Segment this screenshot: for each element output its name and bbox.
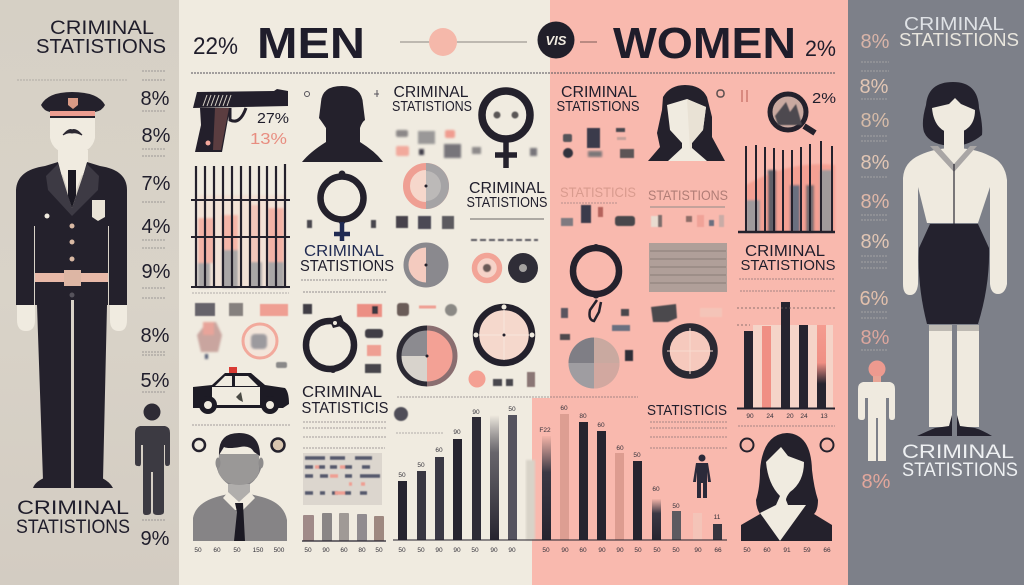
panel: women section background xyxy=(532,0,848,585)
percent column: men: 4% xyxy=(142,216,171,238)
panel: left police column xyxy=(0,0,179,585)
chart: bars with gridlines: 24 xyxy=(800,413,808,420)
axis labels: lower women: 50 xyxy=(743,547,751,554)
heading: criminal statistics 5: CRIMINAL xyxy=(745,243,825,260)
icon: versus connector xyxy=(400,22,597,58)
chart: central bar chart: 90 xyxy=(694,547,702,554)
heading: criminal statistics 4: CRIMINAL xyxy=(561,84,637,101)
percent column: women xyxy=(860,31,891,493)
labels: faded statistics: STATISTICIS xyxy=(560,184,636,200)
table: blurred data grid xyxy=(303,453,382,505)
axis labels: lower men: 50 xyxy=(233,547,241,554)
chart: central bar chart: 11 xyxy=(714,514,721,521)
percent column: women: 8% xyxy=(861,231,890,253)
heading: right bottom criminal statistics xyxy=(902,442,1018,481)
heading: criminal statistics 4 xyxy=(556,84,640,115)
heading: criminal statistics 3: CRIMINAL xyxy=(469,180,545,197)
axis labels: lower men: 150 xyxy=(253,547,264,554)
axis labels: lower women: 91 xyxy=(783,547,791,554)
chart: central bar chart: 90 xyxy=(508,547,516,554)
heading: criminal statistics 1 xyxy=(300,243,394,275)
title: men xyxy=(193,19,365,68)
heading: left bottom criminal statistics: STATISTIONS xyxy=(16,517,130,538)
chart: bars with gridlines xyxy=(737,302,835,420)
chart: ring men xyxy=(474,304,534,363)
heading: left criminal statistics xyxy=(36,18,166,58)
axis labels: lower women: 66 xyxy=(823,547,831,554)
icon: handcuff female symbol xyxy=(307,170,376,241)
heading: right bottom criminal statistics: CRIMINAL xyxy=(902,442,1014,463)
stat: gun percentages: 27% xyxy=(257,110,289,127)
percent column: men: 5% xyxy=(141,370,170,392)
labels: faded statistics: STATISTIONS xyxy=(648,187,728,203)
heading: criminal statistics 2 xyxy=(392,84,472,115)
title: men: MEN xyxy=(257,19,365,68)
chart: central bar chart: 50 xyxy=(417,462,425,469)
heading: criminal statistics 2: STATISTIONS xyxy=(392,98,472,115)
icon: female symbol ring xyxy=(482,91,530,168)
chart: quadrant pie men xyxy=(399,328,455,384)
icon: handcuff on pink xyxy=(573,244,619,321)
chart: gray pie women xyxy=(568,338,620,388)
icons: pink dot row xyxy=(468,370,486,388)
chart: central bar chart: 90 xyxy=(435,547,443,554)
heading: right criminal statistics: STATISTIONS xyxy=(899,30,1019,50)
stat: gun percentages xyxy=(250,110,289,148)
icon: small pink-headed figure xyxy=(858,360,895,461)
icon: man portrait xyxy=(193,433,287,541)
heading: statistics: STATISTICIS xyxy=(647,402,727,419)
heading: criminal statistics 2: CRIMINAL xyxy=(394,84,469,101)
icons: mid row men xyxy=(394,303,535,421)
panel: right woman column xyxy=(848,0,1024,585)
chart: central bar chart: 50 xyxy=(471,547,479,554)
heading: criminal statistics 3 xyxy=(466,180,548,211)
icons: dark tiles xyxy=(396,216,538,240)
icon: small man figure xyxy=(135,404,170,515)
percent column: women: 6% xyxy=(860,288,889,310)
percent column: women: 8% xyxy=(861,327,890,349)
percent column: women: 8% xyxy=(861,152,890,174)
figure: police officer xyxy=(16,92,127,488)
axis labels: lower men: 60 xyxy=(340,547,348,554)
chart: central bar chart: 50 xyxy=(672,503,680,510)
icon: small dark person xyxy=(693,454,711,498)
axis labels: lower men: 80 xyxy=(358,547,366,554)
chart: central bar chart: 50 xyxy=(508,406,516,413)
percent column: men: 9% xyxy=(142,261,171,283)
heading: left bottom criminal statistics xyxy=(16,498,130,538)
heading: criminal statistics 5 xyxy=(740,243,836,274)
icons: small cluster xyxy=(396,130,537,158)
chart: central bar chart: 50 xyxy=(672,547,680,554)
stat: gun percentages: 13% xyxy=(250,131,287,148)
axis labels: lower men: 50 xyxy=(375,547,383,554)
heading: criminal statistics 1: CRIMINAL xyxy=(304,243,384,260)
percent column: women: 8% xyxy=(861,31,890,53)
chart: bars with gridlines: 90 xyxy=(746,413,754,420)
chart: central bar chart: 60 xyxy=(435,447,443,454)
chart: central bar chart: 60 xyxy=(560,405,568,412)
icon: handgun xyxy=(193,89,288,152)
chart: central bar chart: 60 xyxy=(597,422,605,429)
heading: criminal statistics 6 xyxy=(302,384,388,417)
percent column: women: 8% xyxy=(862,471,891,493)
heading: criminal statistics 6: CRIMINAL xyxy=(302,384,382,401)
icon: magnifying glass: 2% xyxy=(812,90,836,107)
icon: pink and dark rings xyxy=(474,253,538,283)
chart: small muted bars xyxy=(302,513,386,541)
icon: handcuff ring 2 xyxy=(306,315,354,373)
chart: central bar chart: F22 xyxy=(539,427,551,434)
icon: police car xyxy=(193,367,289,414)
chart: central bar chart: 60 xyxy=(579,547,587,554)
icons: small row men xyxy=(195,303,383,373)
chart: bars with gridlines: 13 xyxy=(820,413,828,420)
percent column: women: 8% xyxy=(861,191,890,213)
chart: bars with gridlines: 24 xyxy=(766,413,774,420)
heading: criminal statistics 6: STATISTICIS xyxy=(302,400,388,417)
chart: central bar chart: 50 xyxy=(417,547,425,554)
chart: central bar chart: 90 xyxy=(453,429,461,436)
percent column: men: 8% xyxy=(142,125,171,147)
chart: central bar chart: 50 xyxy=(633,452,641,459)
icon: versus connector: VIS xyxy=(546,33,567,48)
icon: magnifying glass xyxy=(742,90,836,133)
icons: small pink row xyxy=(560,304,722,361)
chart: central bar chart: 90 xyxy=(561,547,569,554)
heading: left bottom criminal statistics: CRIMINAL xyxy=(17,498,129,519)
icon: woman portrait xyxy=(740,433,834,541)
axis labels: lower men: 50 xyxy=(194,547,202,554)
chart: bars with gridlines: 20 xyxy=(786,413,794,420)
figure: woman xyxy=(903,82,1007,436)
chart: bars behind prison bars xyxy=(191,164,290,288)
heading: right criminal statistics: CRIMINAL xyxy=(904,14,1004,34)
axis labels: lower men: 500 xyxy=(274,547,285,554)
chart: central bar chart: 50 xyxy=(398,472,406,479)
percent column: men: 8% xyxy=(141,88,170,110)
title: men: 22% xyxy=(193,33,238,60)
percent column: men: 9% xyxy=(141,528,170,550)
heading: left criminal statistics: CRIMINAL xyxy=(50,18,154,39)
heading: criminal statistics 1: STATISTIONS xyxy=(300,258,394,275)
chart: bars with vertical lines xyxy=(738,141,835,232)
icon: woman bust xyxy=(648,85,725,161)
chart: donut 1 xyxy=(406,163,449,209)
chart: central bar chart: 90 xyxy=(490,547,498,554)
chart: central bar chart: 80 xyxy=(579,413,587,420)
axis labels: lower men xyxy=(194,547,383,554)
percent column: women: 8% xyxy=(861,110,890,132)
heading: criminal statistics 4: STATISTIONS xyxy=(556,98,640,115)
title: women: 2% xyxy=(805,36,836,61)
heading: criminal statistics 3: STATISTIONS xyxy=(466,194,548,211)
percent column: women: 8% xyxy=(860,76,889,98)
axis labels: lower women: 59 xyxy=(803,547,811,554)
icons: small women cluster xyxy=(563,128,634,158)
title: women: WOMEN xyxy=(613,19,796,68)
heading: right bottom criminal statistics: STATISTIONS xyxy=(902,460,1018,481)
block: gray striped panel xyxy=(649,243,727,292)
icons: small pink cluster xyxy=(561,205,724,227)
chart: central bar chart: 66 xyxy=(714,547,722,554)
chart: central bar chart: 50 xyxy=(398,547,406,554)
chart: central bar chart: 50 xyxy=(542,547,550,554)
heading: right criminal statistics xyxy=(899,14,1019,50)
heading: criminal statistics 5: STATISTIONS xyxy=(740,257,836,274)
chart: central bar chart: 90 xyxy=(616,547,624,554)
chart: central bar chart xyxy=(393,405,727,554)
percent column: men: 8% xyxy=(141,325,170,347)
axis labels: lower men: 60 xyxy=(213,547,221,554)
chart: central bar chart: 50 xyxy=(653,547,661,554)
percent column: men xyxy=(141,71,171,550)
chart: donut 2 xyxy=(406,243,448,287)
axis labels: lower men: 90 xyxy=(322,547,330,554)
chart: ring women xyxy=(666,327,714,375)
chart: central bar chart: 90 xyxy=(598,547,606,554)
chart: central bar chart: 90 xyxy=(472,409,480,416)
chart: central bar chart: 50 xyxy=(634,547,642,554)
heading: left criminal statistics: STATISTIONS xyxy=(36,36,166,58)
axis labels: lower women xyxy=(743,547,831,554)
axis labels: lower women: 60 xyxy=(763,547,771,554)
percent column: men: 7% xyxy=(142,173,171,195)
chart: central bar chart: 60 xyxy=(652,486,660,493)
labels: faded statistics xyxy=(560,184,728,203)
icon: male silhouette xyxy=(302,86,383,162)
panel: men section background xyxy=(179,0,550,585)
chart: central bar chart: 90 xyxy=(453,547,461,554)
axis labels: lower men: 50 xyxy=(304,547,312,554)
chart: central bar chart: 60 xyxy=(616,445,624,452)
